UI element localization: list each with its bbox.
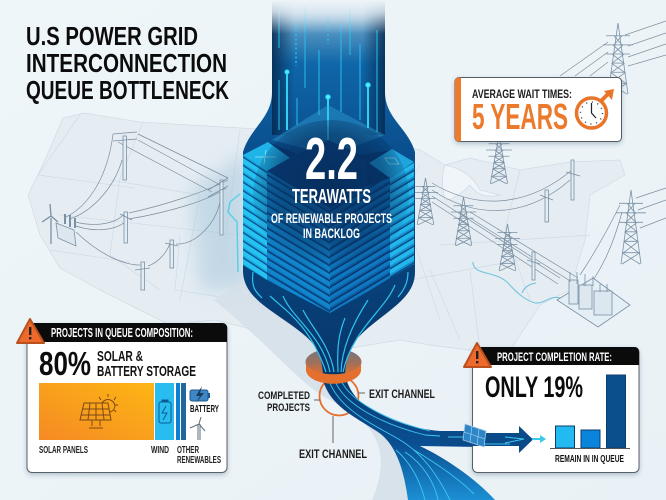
top of block: wind xyxy=(243,142,290,171)
icon: solar panel on arrow xyxy=(463,424,486,447)
icon: battery in bar xyxy=(159,400,171,423)
panel: projects in queue composition: SOLAR & xyxy=(97,348,143,365)
panel: project completion rate: REMAIN IN IN QUEUE xyxy=(555,454,624,465)
label: completed projects: PROJECTS xyxy=(267,402,310,414)
bar chart xyxy=(550,375,630,448)
icon: substation xyxy=(557,272,630,327)
US map outline xyxy=(28,113,625,398)
bottleneck disk back xyxy=(306,348,362,376)
icon: top glyphs xyxy=(255,150,399,164)
soft glow beside stack xyxy=(190,150,250,290)
funnel stream lines xyxy=(253,272,408,372)
arrow into completion panel xyxy=(440,424,546,453)
bottleneck disk front band xyxy=(306,363,361,384)
panel: projects in queue composition: BATTERY STORAGE xyxy=(97,363,196,380)
top of block: center xyxy=(267,140,367,208)
stacked bar xyxy=(39,383,186,440)
panel: average wait times xyxy=(455,78,622,142)
panel: project completion rate: ONLY 19% xyxy=(485,371,583,404)
title: QUEUE BOTTLENECK xyxy=(26,75,229,105)
icon: solar panel xyxy=(80,394,118,428)
icons: lattice towers xyxy=(413,23,646,271)
icon: warning triangle xyxy=(464,343,491,367)
panel: projects in queue composition: RENEWABLES xyxy=(177,455,221,466)
panel: projects in queue composition: SOLAR PANELS xyxy=(39,445,88,456)
title: INTERCONNECTION xyxy=(26,48,227,78)
power lines and towers east xyxy=(413,21,666,327)
exit ring xyxy=(320,376,358,416)
icon: wind turbine xyxy=(190,417,205,440)
panel: average wait times: 5 YEARS xyxy=(472,96,568,137)
icon: transformer xyxy=(56,214,76,246)
label: exit channel right: EXIT CHANNEL xyxy=(369,389,435,401)
cyan riser line west xyxy=(228,194,240,272)
title: U.S POWER GRID xyxy=(26,21,198,51)
label: exit channel right xyxy=(358,389,435,401)
hero figure: IN BACKLOG xyxy=(303,225,360,241)
title xyxy=(26,21,229,105)
label: completed projects xyxy=(258,390,320,414)
icon: battery xyxy=(190,386,210,403)
funnel shadow xyxy=(214,280,440,500)
header bar xyxy=(472,347,639,365)
panel: projects in queue composition: 80% xyxy=(39,345,91,382)
panel: projects in queue composition xyxy=(17,319,227,472)
icons: utility poles xyxy=(113,132,228,290)
panel: average wait times: AVERAGE WAIT TIMES: xyxy=(472,87,572,101)
panel: projects in queue composition: OTHER xyxy=(177,445,199,456)
top vertical energy stream and funnel body xyxy=(243,0,415,376)
icon: warning triangle xyxy=(17,319,44,343)
hero figure xyxy=(271,126,392,241)
output stream xyxy=(322,376,495,500)
icons: east poles xyxy=(527,160,580,280)
inner tapered glow xyxy=(272,105,385,150)
header bar xyxy=(27,323,227,342)
icon: clock with arrow xyxy=(576,89,614,128)
top fade xyxy=(272,0,385,34)
river xyxy=(473,262,560,303)
hero figure: OF RENEWABLE PROJECTS xyxy=(271,210,392,226)
glowing stream lines xyxy=(285,70,370,150)
hero figure: 2.2 xyxy=(305,126,358,192)
panel: projects in queue composition: WIND xyxy=(151,445,169,456)
label: exit channel bottom xyxy=(299,416,367,461)
panel: projects in queue composition: BATTERY xyxy=(190,404,219,415)
label: completed projects: COMPLETED xyxy=(258,390,310,402)
center darkening behind text xyxy=(253,120,409,270)
top of block: solar xyxy=(369,149,414,178)
label: exit channel bottom: EXIT CHANNEL xyxy=(299,449,367,461)
icon: wind turbine xyxy=(42,204,58,244)
isometric backlog stack xyxy=(243,120,414,313)
panel: project completion rate xyxy=(464,343,639,472)
hero figure: TERAWATTS xyxy=(292,186,371,208)
panel: projects in queue composition: PROJECTS IN QUEUE COMPOSITION: xyxy=(51,326,193,340)
stream light lines xyxy=(279,5,377,132)
power lines and poles west xyxy=(42,132,228,290)
